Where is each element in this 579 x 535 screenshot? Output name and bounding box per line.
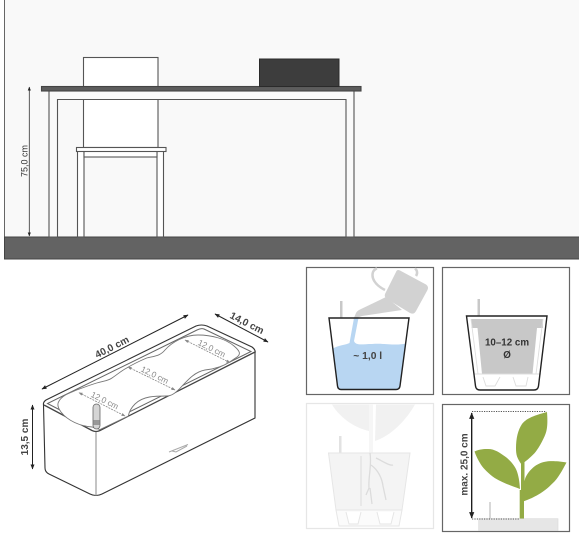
height dimension arrow — [28, 87, 30, 236]
planter body — [43, 325, 255, 496]
wall — [4, 0, 579, 238]
pot edge — [479, 519, 558, 531]
panel: soil fill — [442, 268, 570, 394]
plant height arrow — [471, 413, 473, 518]
faded roots — [366, 453, 393, 504]
faded pot — [328, 453, 410, 510]
depth dimension — [32, 405, 34, 469]
volume label: ~ 1,0 l — [353, 351, 382, 362]
dotted guides — [472, 412, 546, 519]
width label: 14,0 cm — [228, 311, 266, 337]
indicator stick — [340, 301, 342, 318]
panel: planter isometric drawing — [20, 311, 268, 496]
panel: plant height — [442, 404, 570, 532]
diameter label: Ø — [503, 350, 511, 361]
planter front edges — [44, 352, 255, 432]
table — [42, 86, 361, 237]
panel: watering — [306, 268, 434, 394]
inner dimension labels: 12,0 cm — [139, 364, 170, 386]
soil — [472, 319, 543, 374]
faded stick — [339, 436, 342, 453]
stick — [489, 502, 491, 519]
length dimension — [42, 315, 188, 389]
panel: room scene with table and chair — [4, 0, 579, 259]
pot outline — [466, 316, 547, 390]
logo mark — [169, 444, 188, 452]
planter rim — [48, 329, 251, 428]
faded leaves — [332, 404, 415, 452]
icon: plant — [474, 412, 566, 518]
box on table — [260, 59, 339, 86]
indicator stick — [478, 299, 480, 316]
inner dimension arrows — [79, 340, 230, 416]
inner dimension labels: 12,0 cm — [196, 337, 227, 359]
faded arrow — [360, 456, 362, 506]
inner dimension labels: 12,0 cm — [89, 389, 120, 411]
reservoir feet — [471, 319, 543, 386]
plant height label: max. 25,0 cm — [460, 433, 470, 496]
height label: 75,0 cm — [20, 145, 30, 177]
chair — [76, 58, 166, 237]
faded reservoir — [336, 510, 402, 526]
soil height label: 10–12 cm — [485, 338, 529, 348]
pot outline — [329, 318, 409, 390]
panel: faded roots — [306, 404, 434, 528]
width dimension — [215, 314, 268, 342]
water level indicator — [93, 404, 100, 429]
water — [332, 318, 406, 389]
floor — [4, 237, 579, 259]
length label: 40,0 cm — [94, 334, 131, 361]
inner insert outline — [58, 335, 239, 430]
inner dimension labels — [89, 337, 227, 411]
depth label: 13,5 cm — [20, 419, 31, 455]
icon: watering can — [354, 268, 428, 319]
